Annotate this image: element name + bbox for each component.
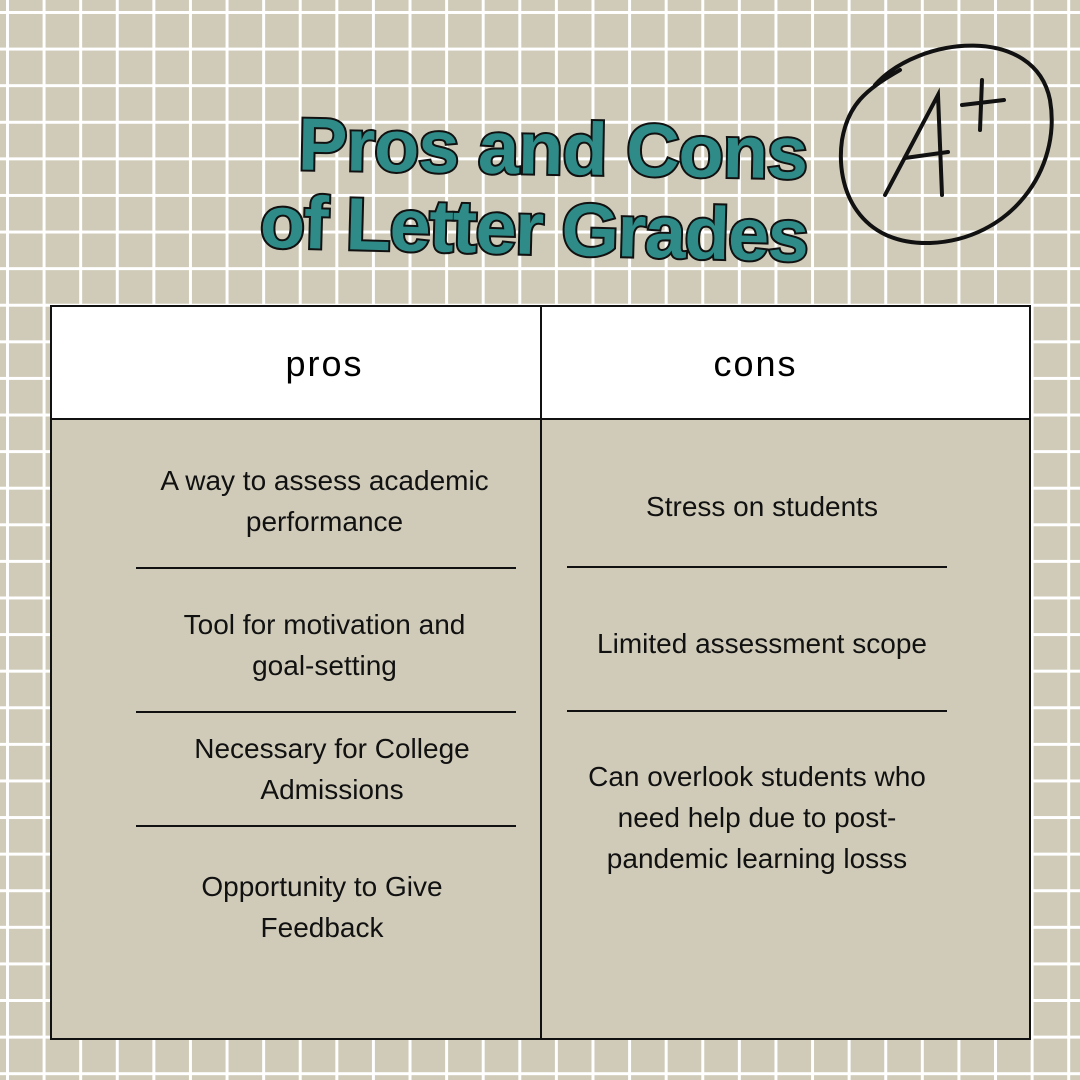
pro 3: Necessary for College	[194, 733, 470, 764]
pro 3: Admissions	[260, 774, 404, 805]
pro 1	[160, 465, 489, 537]
table	[50, 305, 1031, 1040]
title line 2: of Letter Grades	[259, 180, 809, 277]
con 3: Can overlook students who	[588, 761, 926, 792]
pro 4: Opportunity to Give	[201, 871, 443, 902]
header row	[52, 307, 1029, 420]
con 1: Stress on students	[646, 491, 878, 522]
pro 2: Tool for motivation and	[184, 609, 465, 640]
pro 4	[201, 871, 443, 943]
header: cons: cons	[713, 343, 798, 384]
pros column	[136, 465, 516, 943]
pro 1: A way to assess academic	[160, 465, 489, 496]
pro 1: performance	[246, 506, 403, 537]
con 3	[588, 761, 926, 874]
title	[259, 103, 809, 277]
pro 2	[184, 609, 465, 681]
con 3: need help due to post-	[618, 802, 896, 833]
icon: A+ circled grade	[838, 44, 1054, 245]
pro 3	[194, 733, 470, 805]
con 3: pandemic learning losss	[607, 843, 907, 874]
cons column	[567, 491, 947, 874]
con 2: Limited assessment scope	[597, 628, 927, 659]
header: pros: pros	[285, 343, 364, 384]
pro 2: goal-setting	[252, 650, 397, 681]
pro 4: Feedback	[261, 912, 383, 943]
title line 1: Pros and Cons	[297, 103, 808, 194]
